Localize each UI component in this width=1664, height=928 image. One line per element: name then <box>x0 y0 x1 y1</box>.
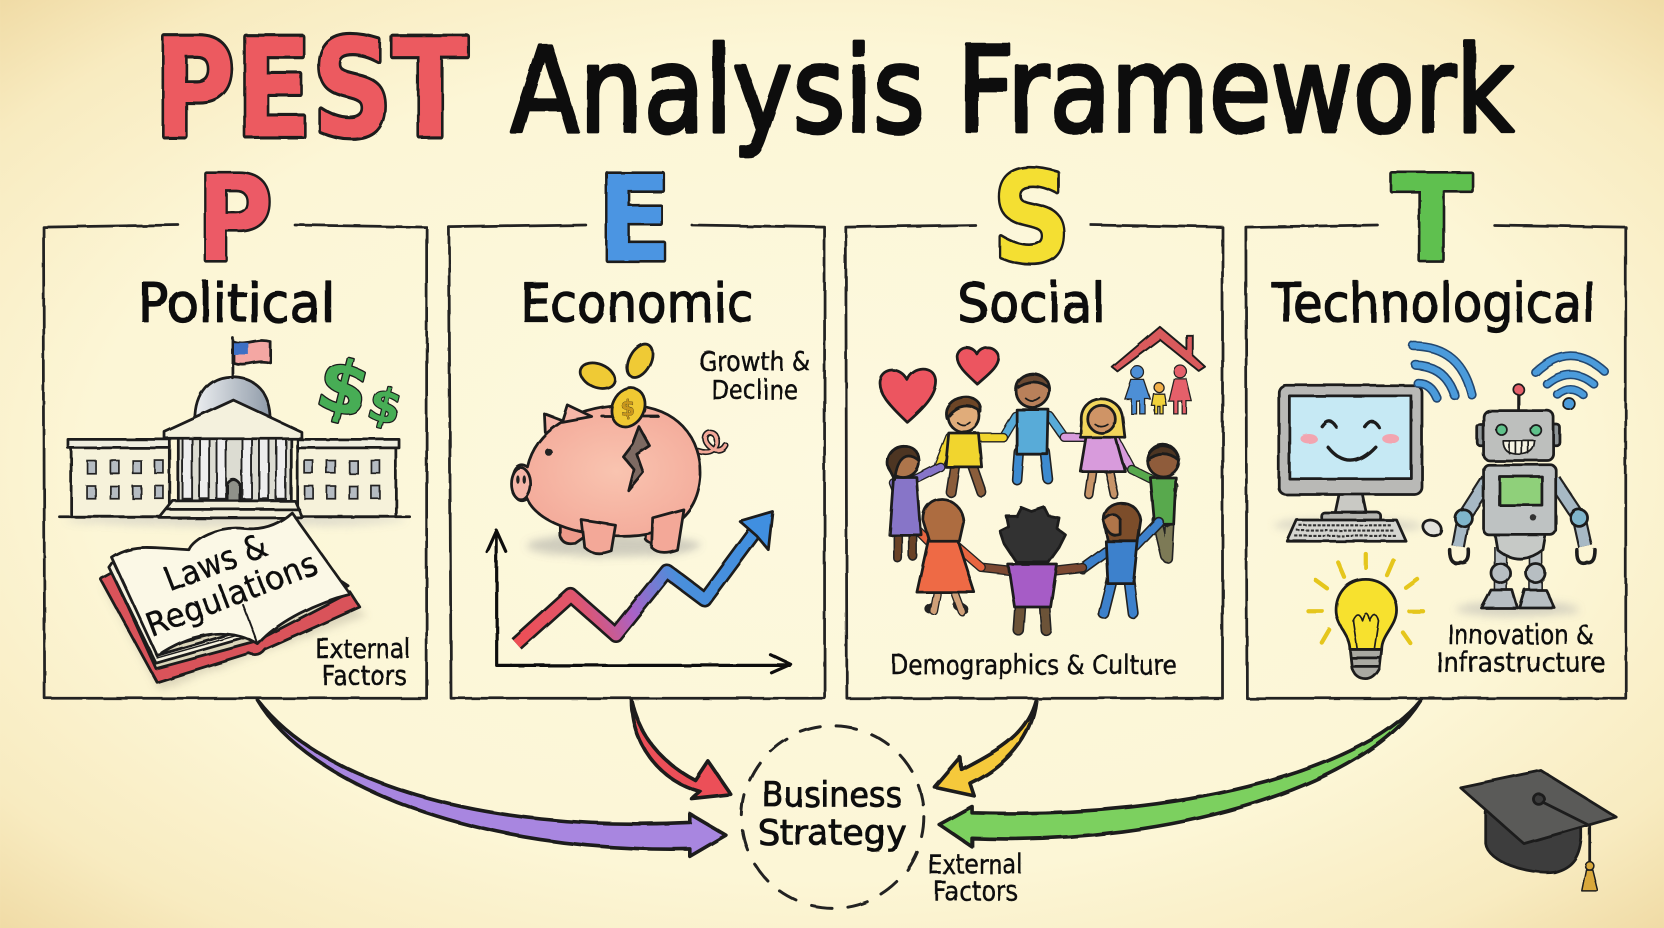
panel: economic <box>449 151 825 698</box>
panel frame: political <box>44 225 427 698</box>
icon: capitol building <box>59 337 410 526</box>
label: demographics & culture: Demographics & Culture <box>890 650 1177 681</box>
icon: graduation cap <box>1460 770 1616 891</box>
icon: dollar signs <box>309 342 407 437</box>
arrow: political to strategy <box>258 700 726 856</box>
person: purple figure centre <box>982 507 1082 630</box>
icon: law book: Regulations <box>140 544 323 645</box>
title: Analysis Framework <box>510 23 1514 161</box>
heading: Political: Political <box>138 273 335 335</box>
node: business strategy: Business <box>762 775 902 815</box>
person: blue figure top <box>1003 374 1064 480</box>
icon: robot <box>1450 384 1595 617</box>
icon: piggy bank <box>512 405 726 557</box>
label: external factors: Factors <box>322 660 406 691</box>
heading: Social: Social <box>957 273 1106 335</box>
panel: social <box>846 145 1223 698</box>
title: PEST <box>154 11 468 169</box>
icon: law book <box>101 513 366 690</box>
letter S: S <box>992 145 1071 291</box>
label: innovation & infrastructure: Infrastructure <box>1436 648 1606 679</box>
label: innovation & infrastructure <box>1436 620 1606 679</box>
icon: wifi signals <box>1414 346 1605 410</box>
heading: Technological: Technological <box>1271 273 1596 335</box>
icon: hearts <box>880 348 999 422</box>
person: green figure <box>1131 445 1179 558</box>
panel frame: economic <box>449 225 825 698</box>
arrow: technological to strategy <box>939 700 1420 847</box>
icon: family and house <box>1112 327 1206 414</box>
icon: light bulb <box>1308 554 1423 679</box>
panel: political <box>44 151 427 698</box>
panel frame: social <box>846 225 1223 698</box>
person: pink figure <box>1064 399 1131 495</box>
arrow: economic to strategy <box>631 700 731 799</box>
heading: Economic: Economic <box>520 273 753 335</box>
label: innovation & infrastructure: Innovation & <box>1447 620 1594 651</box>
icon: dollar signs: $ <box>362 377 407 437</box>
panel frame: technological <box>1246 225 1626 698</box>
panel: technological <box>1246 151 1626 698</box>
icon: dollar signs: $ <box>309 342 378 435</box>
book text: Laws & <box>159 525 272 600</box>
icon: computer <box>1273 385 1443 541</box>
label: external factors <box>928 849 1023 907</box>
label: external factors: External <box>928 849 1023 880</box>
label: growth & decline <box>699 346 810 406</box>
label: growth & decline: Decline <box>711 375 798 406</box>
label: external factors <box>315 634 411 691</box>
icon: coins: $ <box>621 397 636 422</box>
label: external factors: External <box>315 634 411 665</box>
person: purple-blue figure <box>887 446 940 558</box>
person: blue figure right <box>1082 503 1159 613</box>
letter P: P <box>196 151 273 289</box>
arrow: social to strategy <box>935 700 1036 796</box>
chart: rising line <box>487 511 791 673</box>
node: business strategy: Strategy <box>758 814 906 854</box>
letter T: T <box>1391 151 1472 289</box>
node: business strategy <box>742 726 924 908</box>
person: yellow figure <box>938 397 1003 492</box>
label: external factors: Factors <box>933 876 1018 907</box>
label: growth & decline: Growth & <box>699 346 810 377</box>
illustration: people circle <box>887 374 1179 630</box>
icon: coins <box>576 340 658 432</box>
title <box>154 11 1514 169</box>
person: orange figure <box>909 500 982 611</box>
letter E: E <box>597 151 672 289</box>
